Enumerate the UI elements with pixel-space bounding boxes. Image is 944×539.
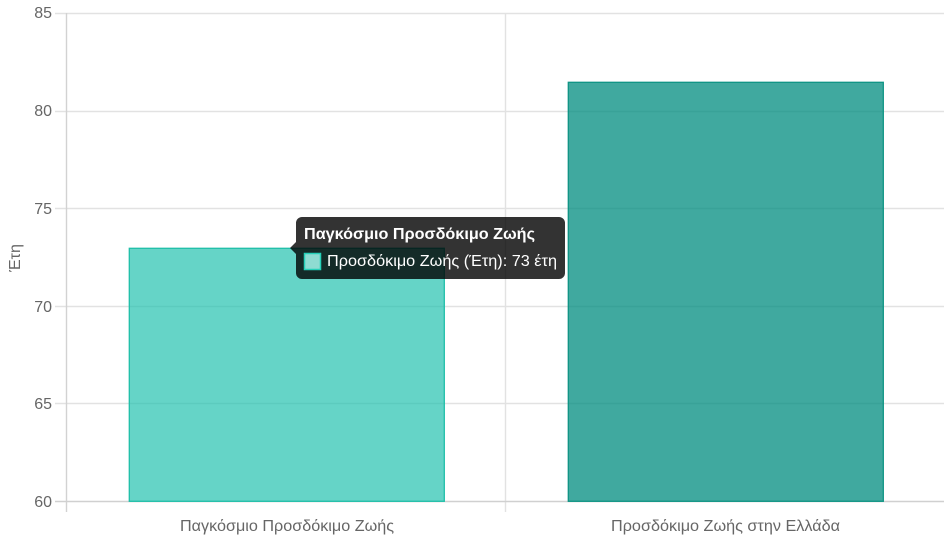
tooltip body: Προσδόκιμο Ζωής (Έτη): 73 έτη — [327, 253, 557, 270]
bar: life expectancy in Greece — [568, 82, 883, 501]
y axis tick labels: 80 — [34, 103, 52, 120]
y axis tick labels: 60 — [34, 494, 52, 511]
x axis labels: Παγκόσμιο Προσδόκιμο Ζωής — [180, 518, 394, 535]
x axis labels: Προσδόκιμο Ζωής στην Ελλάδα — [611, 518, 840, 535]
x axis labels — [180, 518, 840, 535]
y axis tick labels — [34, 5, 52, 511]
tooltip title: Παγκόσμιο Προσδόκιμο Ζωής — [304, 226, 535, 243]
tooltip colour swatch — [304, 254, 320, 270]
tooltip — [290, 217, 565, 279]
y axis tick labels: 75 — [34, 201, 52, 218]
bar: global life expectancy — [129, 248, 444, 501]
y axis tick labels: 70 — [34, 299, 52, 316]
y axis tick labels: 65 — [34, 396, 52, 413]
y axis tick labels: 85 — [34, 5, 52, 22]
y axis title: Έτη — [7, 244, 24, 273]
